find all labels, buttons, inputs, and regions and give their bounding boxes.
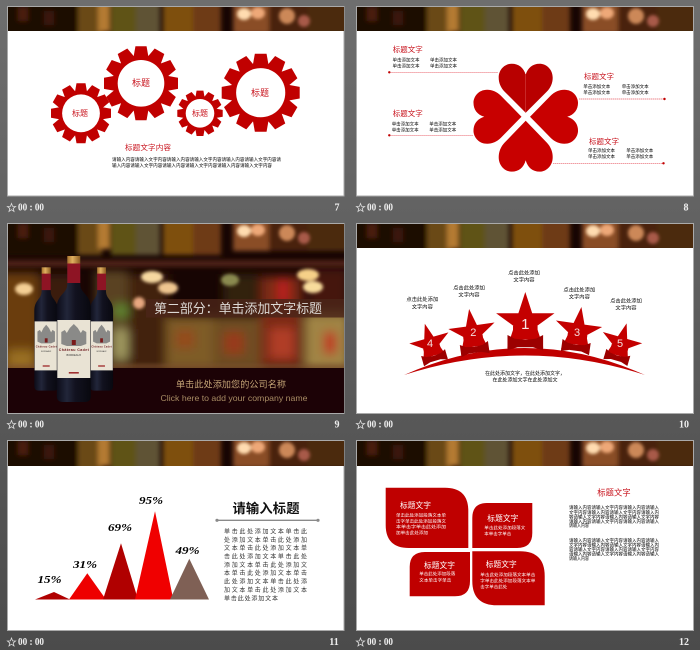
- right paragraph 2: 请输入内容: [569, 555, 589, 562]
- content body: [112, 156, 281, 169]
- petal 1: 加单击此处添加: [396, 529, 428, 536]
- petal 1: 击字单击此处添加段落文: [396, 518, 447, 524]
- right heading: 标题文字: [597, 488, 631, 498]
- bottom text: 在此处添加文字，在此处添加文字，: [485, 370, 565, 377]
- star 2: [446, 306, 499, 358]
- label 3: 文字内容: [569, 292, 591, 300]
- text group lower right: 标题文字: [589, 136, 619, 146]
- connector lines: [388, 71, 666, 164]
- bottom text: 在此处添加文字在此处添加文: [492, 376, 558, 383]
- label 5: 点击此处添加: [610, 296, 642, 304]
- gear 3: [177, 91, 223, 136]
- text group lower left: 单击添加文本: [429, 120, 457, 127]
- text group upper left: 单击添加文本: [392, 56, 420, 63]
- star 3: 3: [574, 327, 580, 339]
- text group upper right: [583, 71, 649, 96]
- star 4: 4: [427, 338, 433, 350]
- body text: 文本单击此处添加文本单: [224, 544, 307, 552]
- slide 12 footer: 12: [679, 637, 689, 648]
- slide 10: stars: [347, 219, 700, 414]
- text group lower left: 单击添加文本: [392, 120, 419, 127]
- text group upper right: 单击添加文本: [583, 89, 611, 96]
- petal 1: 标题文字: [400, 500, 431, 510]
- right paragraph 2: 请输入内容请输入文字内容请输入内容请输入: [569, 537, 659, 544]
- slide 9: section cover: [0, 219, 353, 414]
- slide 9 footer: 00 : 00: [18, 420, 44, 430]
- label 3: [563, 285, 595, 300]
- slide 8 footer: 00 : 00: [367, 202, 393, 214]
- slide 11 header photo: [8, 441, 344, 466]
- content body: 输入内容请输入文字内容请输入内容请输入文字内容请输入内容请输入文字内容: [112, 162, 272, 169]
- wine bottles: [34, 256, 113, 402]
- section title: 第二部分：单击添加文字标题: [154, 301, 322, 316]
- label 1: [508, 268, 540, 283]
- text group lower left: [392, 108, 457, 133]
- star 1: 1: [521, 316, 529, 333]
- body text: 加文本单击此处添加文本: [224, 586, 307, 594]
- label 2: 点击此处添加: [453, 284, 485, 292]
- text group lower right: 单击添加文本: [626, 147, 654, 154]
- value labels: 69%: [108, 522, 132, 534]
- label 1: 点击此处添加: [508, 268, 540, 276]
- label 3: 点击此处添加: [563, 285, 595, 293]
- body text: 单击此处添加文本单击此: [224, 528, 307, 536]
- slide 7 footer: 7: [334, 202, 340, 214]
- slide 8 footer: [356, 202, 688, 214]
- title rule: [215, 519, 320, 522]
- right paragraph 2: [569, 537, 659, 562]
- petal 3: [410, 552, 470, 596]
- body text: 处添加文本单击此处添加: [224, 536, 307, 544]
- slide 8 header photo: [357, 7, 693, 31]
- star 5: [596, 318, 646, 368]
- label 2: [453, 284, 485, 299]
- star 4: [405, 318, 456, 368]
- label 4: [406, 295, 438, 310]
- slide 9 footer: [7, 420, 340, 430]
- body text: [224, 528, 307, 602]
- text group upper left: 标题文字: [393, 44, 423, 54]
- text group lower right: [588, 136, 654, 160]
- text group lower left: 标题文字: [393, 108, 423, 118]
- petal 3: 文本单击字单击: [419, 576, 451, 584]
- right paragraph 1: 请输入内容请输入文字内容请输入内容请输入: [569, 504, 659, 511]
- text group upper left: [392, 44, 457, 70]
- text group lower right: 单击添加文本: [588, 147, 615, 154]
- right paragraph 1: 文字内容请输入内容请输入文字内容请输入内: [569, 509, 659, 516]
- value labels: 31%: [72, 559, 97, 571]
- company name: 单击此处添加您的公司名称: [176, 378, 286, 390]
- star 2: 2: [470, 327, 476, 339]
- label 4: 文字内容: [412, 302, 434, 310]
- value labels: 15%: [38, 574, 62, 586]
- right paragraph 1: [569, 504, 659, 529]
- gear 4: 标题: [251, 87, 269, 98]
- text group upper right: 标题文字: [584, 71, 614, 81]
- slide 7 header photo: [8, 7, 344, 31]
- text group lower left: 单击添加文本: [392, 126, 419, 133]
- gear 3: 标题: [192, 108, 208, 118]
- slide 7: gears: [0, 2, 353, 196]
- slide 12 footer: [356, 637, 689, 648]
- label 2: 文字内容: [458, 291, 480, 299]
- triangle chart: [35, 511, 209, 600]
- slide 8 footer: 8: [684, 202, 688, 214]
- slide 12 footer: 00 : 00: [367, 637, 393, 648]
- text group upper left: 单击添加文本: [430, 56, 457, 63]
- petal 1: 单击此处添加段落文本单: [396, 512, 446, 518]
- petal 2: 本单击字单击: [484, 530, 511, 537]
- text group upper left: 单击添加文本: [430, 63, 457, 70]
- value labels: 95%: [139, 495, 163, 507]
- label 5: [610, 296, 642, 311]
- slide 12 header photo: [357, 441, 693, 466]
- text group upper right: 单击添加文本: [622, 83, 649, 90]
- value labels: 49%: [174, 545, 200, 557]
- text group upper left: 单击添加文本: [392, 63, 420, 70]
- four-heart clover: [473, 64, 578, 172]
- petal 3: 单击此处添加段落: [419, 570, 456, 577]
- petal 4: 标题文字: [486, 559, 517, 569]
- slide 12: petals: [347, 436, 700, 630]
- petal 4: 击字单击此处: [480, 583, 508, 590]
- slide 8: hearts: [347, 2, 700, 196]
- slide 7 footer: 00 : 00: [18, 202, 44, 214]
- body text: 击此处添加文本单击此处: [224, 552, 307, 560]
- slide 10 header photo: [357, 224, 693, 248]
- slide 9 footer: 9: [334, 420, 340, 430]
- counter band: [8, 368, 344, 413]
- body text: 此处添加文本单击此处添: [224, 578, 307, 586]
- company name english: Click here to add your company name: [160, 393, 308, 403]
- label 1: 文字内容: [513, 275, 535, 283]
- slide 11 footer: 00 : 00: [18, 637, 44, 648]
- bottom text: [485, 370, 565, 383]
- gear 2: [104, 46, 178, 120]
- gear 2: 标题: [132, 77, 150, 88]
- petal 1: [386, 488, 468, 548]
- label 5: 文字内容: [615, 303, 637, 311]
- right paragraph 2: 容请输入文字内容请输入内容请输入文字内容: [569, 546, 659, 553]
- petal 4: 字单击此处添加段落文本单: [480, 577, 535, 584]
- title: 请输入标题: [232, 498, 300, 517]
- gear 1: 标题: [72, 108, 88, 118]
- section title banner: [146, 299, 344, 318]
- arc: [404, 348, 645, 375]
- content body: 请输入内容请输入文字内容请输入内容请输入文字内容请输入内容请输入文字内容请: [112, 156, 281, 163]
- slide 11 footer: 11: [329, 637, 339, 648]
- label 4: 点击此处添加: [406, 295, 438, 303]
- body text: 本单击此处添加文本单击: [224, 569, 307, 577]
- petal 4: 单击此处添加段落文本单击: [480, 571, 535, 578]
- bar photo: [8, 224, 344, 368]
- right paragraph 2: 请输入内容请输入文字内容请输入内容请输入: [569, 550, 659, 558]
- star 1: [496, 292, 554, 350]
- gear 4: [222, 54, 300, 132]
- petal 3: 标题文字: [424, 560, 455, 570]
- petal 4: [472, 551, 545, 605]
- text group upper right: 单击添加文本: [583, 83, 611, 90]
- star 3: [552, 304, 604, 356]
- petal 2: [472, 503, 532, 548]
- text group lower right: 单击添加文本: [588, 153, 615, 160]
- petal 2: 单击此处添加段落文: [484, 524, 526, 531]
- gear 1: [51, 83, 111, 143]
- body text: 添加文本单击此处添加文: [224, 561, 307, 569]
- body text: 单击此处添加文本: [224, 594, 278, 602]
- right paragraph 1: 容请输入文字内容请输入内容请输入文字内容: [569, 513, 659, 520]
- star 5: 5: [617, 338, 623, 350]
- slide 10 footer: 10: [679, 420, 689, 430]
- right paragraph 1: 请输入内容请输入文字内容请输入内容请输入: [569, 518, 659, 525]
- value labels: [38, 495, 200, 586]
- content heading: 标题文字内容: [125, 142, 171, 152]
- right paragraph 2: 文字内容请输入内容请输入文字内容请输入内: [569, 542, 659, 548]
- slide 11: peak chart: [0, 436, 353, 630]
- slide 7 footer: [7, 202, 340, 214]
- text group lower right: 单击添加文本: [626, 153, 654, 160]
- petal 2: 标题文字: [487, 513, 519, 523]
- text group lower left: 单击添加文本: [429, 126, 457, 133]
- petal 1: 本单击字单击此处添加: [396, 523, 446, 530]
- right paragraph 1: 请输入内容: [569, 522, 589, 529]
- slide 10 footer: [356, 420, 689, 430]
- text group upper right: 单击添加文本: [622, 89, 649, 96]
- slide 10 footer: 00 : 00: [367, 420, 393, 430]
- slide 11 footer: [7, 637, 339, 648]
